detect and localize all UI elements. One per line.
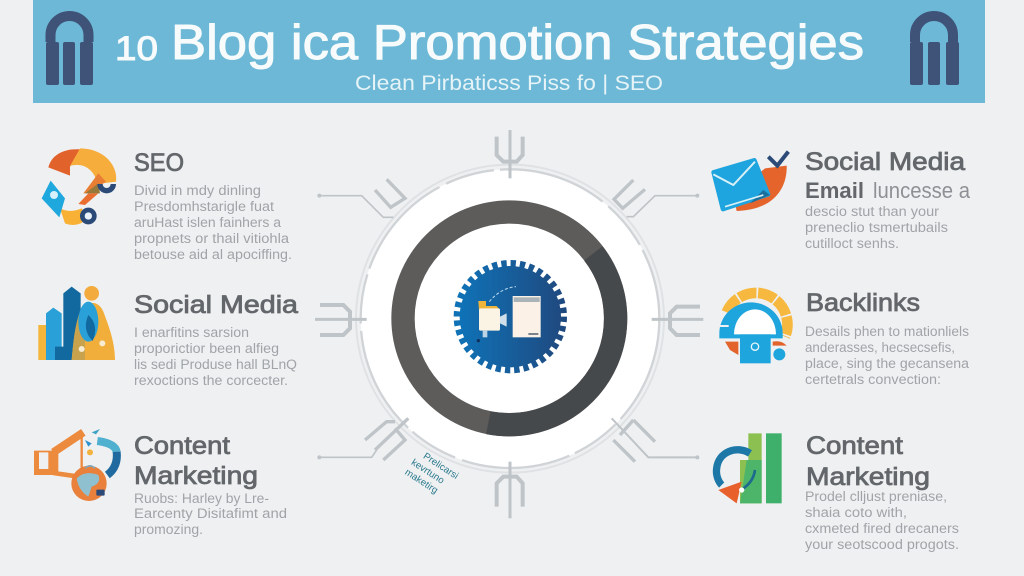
text: Backlinks body: place, sing the gecansena — [805, 356, 970, 371]
icon: envelope — [713, 152, 788, 211]
icon: city and person — [38, 286, 115, 360]
subheading: Email: luncesse a — [873, 178, 971, 203]
icon: left arch — [46, 16, 93, 85]
text: SEO body: Presdomhstarigle fuat — [134, 199, 274, 214]
small rotated label: Prelicarsi — [421, 451, 460, 482]
panel: Social Media left — [38, 286, 298, 388]
dark ring — [403, 212, 616, 425]
connector: right — [652, 307, 703, 335]
text: Content Marketing body — [805, 489, 959, 552]
icon: camera — [477, 287, 516, 342]
text: Backlinks body: certetrals convection: — [805, 372, 941, 387]
connector: upper left — [317, 179, 405, 217]
heading: Content Marketing: Content — [134, 432, 230, 460]
heading: Content Marketing: Marketing — [134, 462, 258, 490]
central hub diagram — [315, 130, 703, 518]
heading: SEO: SEO — [134, 149, 184, 177]
text: SEO body: Divid in mdy dinling — [134, 183, 261, 198]
title: Blog ica Promotion Strategies — [171, 16, 864, 70]
heading: Content Marketing: Marketing — [806, 463, 930, 491]
heading: Social Media: Social Media — [805, 148, 965, 176]
text: Content Marketing body: your seotscood progots. — [805, 537, 959, 552]
small rotated label — [403, 447, 460, 501]
heading: Social Media: Social Media — [134, 291, 298, 319]
text: Content Marketing body: Earcenty Disitafimt and — [134, 506, 287, 521]
text: Social Media body: rexoctions the corcecter. — [134, 373, 288, 388]
icon: SEO — [42, 148, 116, 225]
text: Email body — [805, 204, 948, 251]
subheading: Email — [805, 178, 971, 203]
text: Social Media body: lis sedi Produse hall BLnQ — [134, 357, 297, 372]
text: SEO body: aruHast islen fainhers a — [134, 215, 282, 230]
text: SEO body: betouse aid al apociffing. — [134, 247, 292, 262]
connector: bottom — [497, 462, 523, 518]
heading: Content Marketing: Content — [806, 432, 903, 460]
connector: upper right — [614, 180, 699, 217]
connector: lower right — [612, 418, 699, 462]
subtitle: Clean Pirbaticss Piss fo | SEO — [355, 72, 663, 95]
text: Content Marketing body — [134, 491, 287, 537]
icon: crane and globe — [34, 429, 117, 501]
panel: Content Marketing left — [34, 429, 287, 537]
header banner — [33, 0, 985, 103]
panel: Social Media Email right — [713, 148, 971, 251]
heading: Content Marketing — [134, 432, 258, 490]
text: Content Marketing body: shaia coto with, — [805, 505, 907, 520]
text: SEO body: propnets or thail vitiohla — [134, 231, 290, 246]
title: 10 — [115, 30, 158, 68]
text: Email body: preneclio tsmertubails — [805, 220, 948, 235]
icon: backlinks dome — [719, 293, 787, 363]
text: Social Media body — [134, 325, 297, 388]
outer rings — [356, 165, 664, 473]
text: Content Marketing body: promozing. — [134, 522, 203, 537]
gear — [457, 264, 563, 370]
subheading: Email: Email — [805, 178, 864, 203]
text: Email body: cutilloct senhs. — [805, 236, 899, 251]
connector: left — [315, 305, 367, 335]
white disc — [361, 169, 659, 468]
text: Email body: descio stut than your — [805, 204, 940, 219]
icon: bars and arc — [716, 433, 782, 503]
icon: document — [513, 296, 541, 337]
text: Backlinks body: anderasses, hecsecsefis, — [805, 340, 955, 355]
small rotated label: maketirg — [403, 467, 440, 496]
panel: SEO — [42, 148, 292, 262]
connector: top — [497, 130, 523, 178]
icon: right arch — [910, 16, 959, 85]
panel: Backlinks — [719, 289, 970, 387]
text: Backlinks body: Desails phen to mationliels — [805, 324, 969, 339]
text: SEO body — [134, 183, 292, 262]
text: Social Media body: proporictior been alfieg — [134, 341, 279, 356]
heading: Backlinks: Backlinks — [806, 289, 920, 317]
small rotated label: kevrtuno — [409, 457, 446, 487]
text: Content Marketing body: Ruobs: Harley by Lre- — [134, 491, 269, 506]
text: Content Marketing body: Prodel clljust preniase, — [805, 489, 947, 504]
text: Backlinks body — [805, 324, 970, 387]
heading: Content Marketing — [806, 432, 930, 491]
text: Content Marketing body: cxmeted fired drecaners — [805, 521, 959, 536]
text: Social Media body: I enarfitins sarsion — [134, 325, 249, 340]
panel: Content Marketing right — [716, 432, 959, 552]
connector: lower left — [317, 418, 408, 460]
